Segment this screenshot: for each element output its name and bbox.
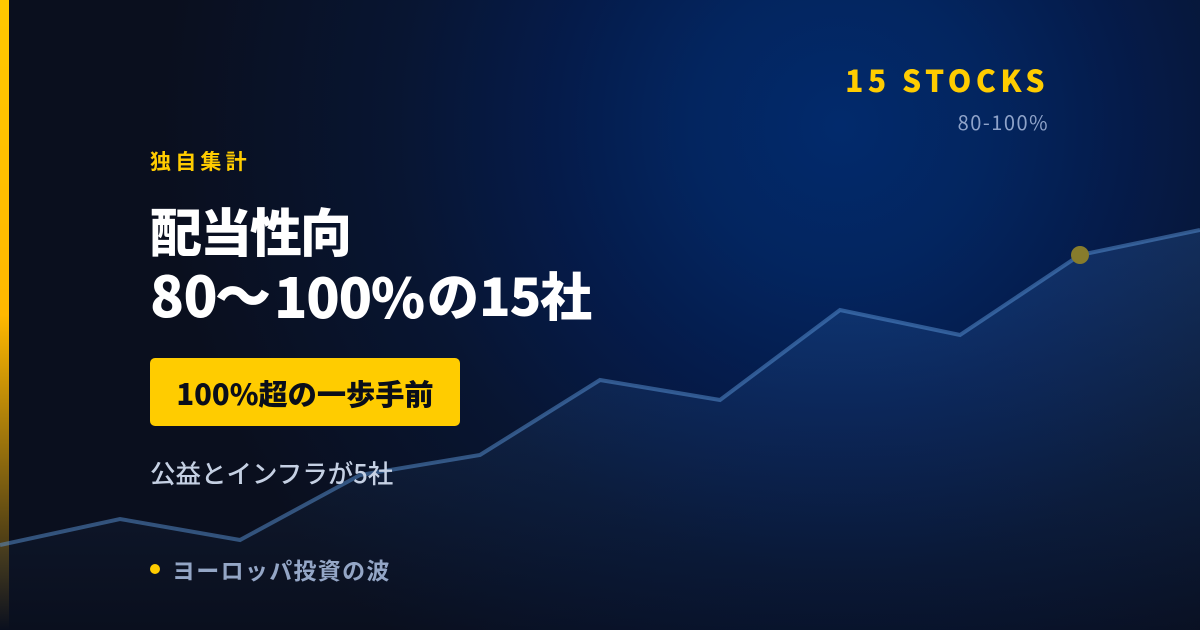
title line 2: 80 (150, 253, 217, 334)
title line 2 (150, 253, 592, 334)
chart area fill (0, 230, 1200, 630)
title line 2: の (427, 256, 479, 331)
bullet item (150, 552, 391, 586)
title line 2: 100% (274, 254, 424, 334)
badge (150, 358, 460, 426)
title line 2: 社 (540, 256, 592, 331)
badge text: 100%超の一歩手前 (176, 372, 434, 414)
eyebrow label: 独自集計 (150, 146, 251, 176)
subtitle: 公益とインフラが5社 (150, 454, 393, 491)
title (150, 192, 592, 334)
bullet dot (150, 564, 160, 574)
title line 1: 配当性向 (150, 192, 350, 267)
stocks label: 15 STOCKS (845, 57, 1049, 101)
highlighted data point (1071, 246, 1089, 264)
range label: 80-100% (958, 107, 1049, 136)
left accent bar (0, 0, 9, 630)
bullet text: ヨーロッパ投資の波 (172, 552, 391, 586)
title line 2: 15 (479, 256, 540, 331)
chart line (0, 230, 1200, 545)
title line 2: 〜 (215, 253, 271, 334)
